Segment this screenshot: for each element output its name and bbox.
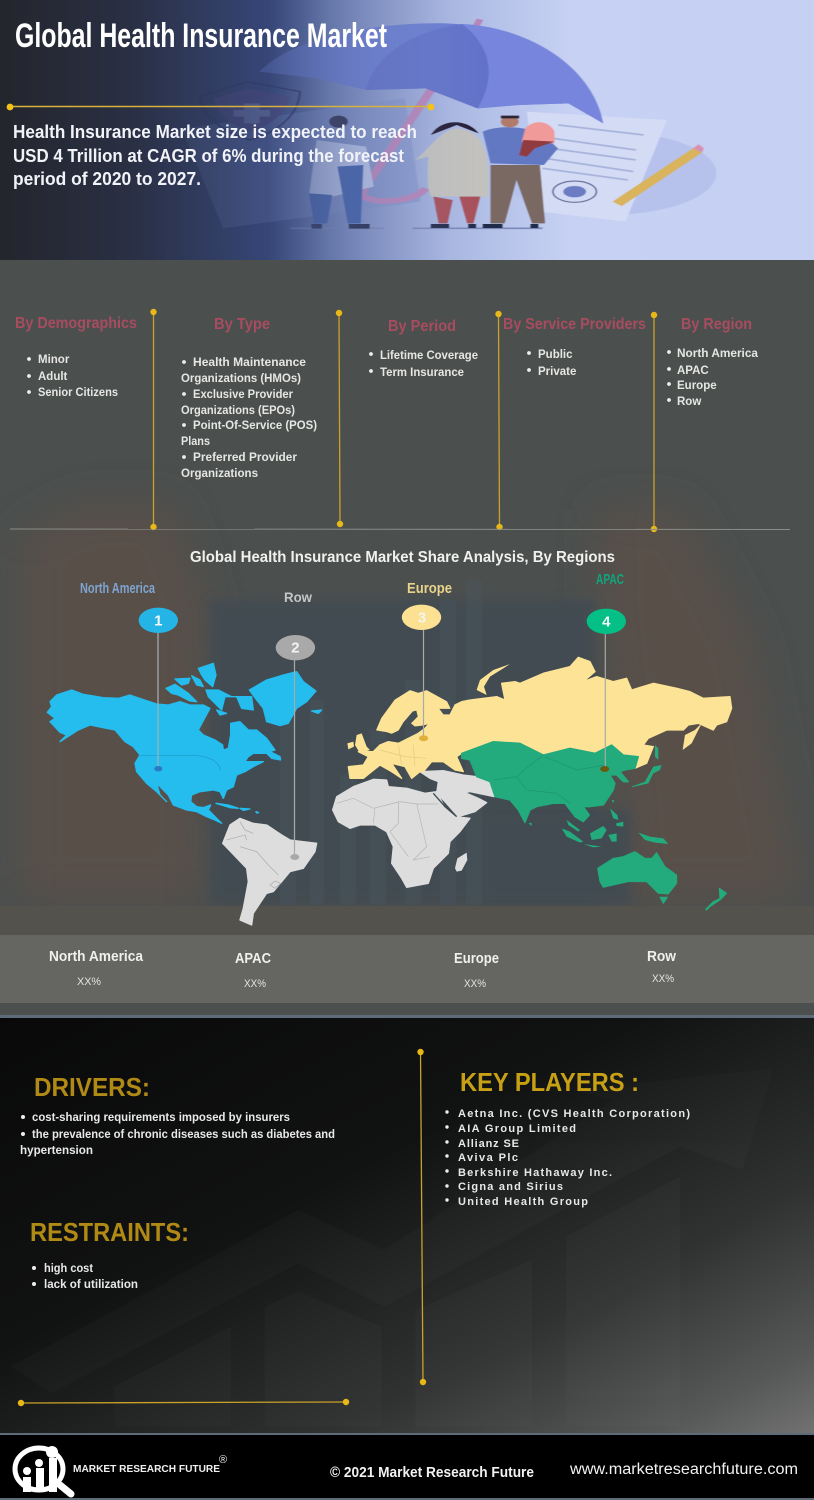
callout: pin 4 APAC: 4 [602, 614, 611, 630]
stat: Row: XX% [652, 973, 674, 985]
column: By Period: Term Insurance [380, 367, 464, 379]
callout: pin 1 North America [139, 608, 178, 771]
column: By Region: North America [677, 348, 759, 360]
column: By Region: Europe [677, 380, 717, 392]
list: drivers: hypertension [20, 1145, 93, 1157]
text: copyright: © 2021 Market Research Future [330, 1465, 534, 1481]
text block: market summary: Health Insurance Market size is expected to reach [13, 121, 417, 142]
list: drivers: the prevalence of chronic diseases such as diabetes and [32, 1129, 335, 1141]
callout: pin 2 Row: 2 [291, 640, 300, 656]
column: By Type: By Type [214, 316, 270, 333]
background: rising arrow and bars [10, 1068, 773, 1427]
map region: Africa and Middle East [333, 771, 494, 887]
callout: pin 1 North America: 1 [154, 612, 162, 630]
column: By Period: Lifetime Coverage [380, 350, 478, 362]
callout: pin 4 APAC [587, 609, 626, 772]
heading: title: Global Health Insurance Market [15, 17, 387, 55]
stat: Row [647, 949, 677, 985]
column: By Type: Health Maintenance [193, 357, 306, 369]
column: By Region: APAC [677, 365, 709, 377]
illustration: umbrella and family [182, 19, 716, 229]
list: key players: Aviva Plc [458, 1152, 518, 1164]
chart: world map by region [47, 605, 732, 925]
text: website: www.marketresearchfuture.com [569, 1461, 798, 1478]
list: key players: United Health Group [458, 1196, 588, 1208]
list: key players [445, 1108, 690, 1208]
stat: APAC: APAC [235, 951, 271, 967]
callout: pin 2 Row [276, 635, 315, 860]
stat: Row: Row [647, 949, 677, 965]
column: By Period: By Period [388, 318, 456, 335]
label: APAC: APAC [596, 571, 624, 588]
panel: segmentation and map background [0, 260, 814, 1017]
text: brand name: MARKET RESEARCH FUTURE [73, 1464, 220, 1475]
callout: pin 3 Europe [402, 605, 441, 741]
label: Row: Row [284, 589, 312, 605]
column: By Type: Organizations (EPOs) [181, 405, 295, 417]
callout: pin 3 Europe: 3 [418, 610, 426, 626]
list: restraints [32, 1263, 138, 1291]
column: By Demographics: Minor [38, 354, 70, 366]
column: By Type: Organizations (HMOs) [181, 373, 301, 385]
map region: APAC [462, 742, 727, 910]
column: By Period [369, 318, 478, 379]
panel: drivers, restraints, key players [0, 1015, 814, 1435]
heading: Drivers: DRIVERS: [34, 1072, 150, 1102]
column: By Type: Plans [181, 436, 210, 448]
stat: North America: North America [49, 949, 144, 965]
column: By Region: Row [677, 396, 701, 408]
panel: market share band [0, 935, 814, 1003]
map region: Europe and Russia [347, 657, 732, 778]
text block: market summary: period of 2020 to 2027. [13, 168, 201, 189]
list: key players: Aetna Inc. (CVS Health Corporation) [458, 1108, 690, 1120]
column: By Service Providers: Private [538, 366, 576, 378]
column: By Type: Organizations [181, 468, 258, 480]
icon: company logo [15, 1446, 71, 1494]
heading: Key Players: KEY PLAYERS : [460, 1067, 639, 1097]
stat: North America: XX% [77, 976, 101, 988]
list: restraints: high cost [44, 1263, 93, 1275]
column: By Service Providers: Public [538, 349, 573, 361]
column: By Demographics: Adult [38, 371, 68, 383]
panel: footer [0, 1433, 814, 1500]
column: By Type [181, 316, 317, 480]
list: restraints: lack of utilization [44, 1279, 138, 1291]
list: key players: Cigna and Sirius [458, 1181, 563, 1193]
column: By Service Providers [503, 316, 646, 378]
list: key players: Allianz SE [458, 1138, 519, 1150]
list: drivers [20, 1112, 335, 1157]
column dividers [150, 309, 657, 532]
text block: market summary [13, 121, 417, 189]
heading: map section: Global Health Insurance Market Share Analysis, By Regions [190, 549, 615, 566]
column: By Service Providers: By Service Providers [503, 316, 646, 333]
stat: Europe [454, 951, 499, 990]
column: By Region: By Region [681, 316, 752, 333]
map region: North America [47, 663, 322, 823]
label: North America: North America [80, 580, 155, 597]
column: By Demographics [15, 315, 137, 399]
stat: APAC [235, 951, 271, 990]
panel: segmentation columns [10, 309, 790, 532]
text: registered mark: ® [219, 1454, 227, 1466]
heading: Restraints: RESTRAINTS: [30, 1217, 189, 1247]
list: key players: AIA Group Limited [458, 1123, 576, 1135]
stat: North America [49, 949, 144, 988]
column: By Region [667, 316, 759, 408]
divider line with dots [7, 104, 434, 110]
column: By Type: Exclusive Provider [193, 389, 294, 401]
map region: South America [223, 818, 317, 925]
panel: hero banner [0, 0, 814, 260]
list: drivers: cost-sharing requirements imposed by insurers [32, 1112, 290, 1124]
gold dividers [18, 1049, 426, 1406]
text block: market summary: USD 4 Trillion at CAGR of 6% during the forecast [13, 145, 404, 166]
column: By Demographics: Senior Citizens [38, 387, 118, 399]
stat: Europe: XX% [464, 978, 486, 990]
list: key players: Berkshire Hathaway Inc. [458, 1167, 612, 1179]
column: By Type: Preferred Provider [193, 452, 298, 464]
stat: APAC: XX% [244, 978, 266, 990]
stat: Europe: Europe [454, 951, 499, 967]
column: By Demographics: By Demographics [15, 315, 137, 332]
label: Europe: Europe [407, 580, 452, 597]
column: By Type: Point-Of-Service (POS) [193, 420, 317, 432]
